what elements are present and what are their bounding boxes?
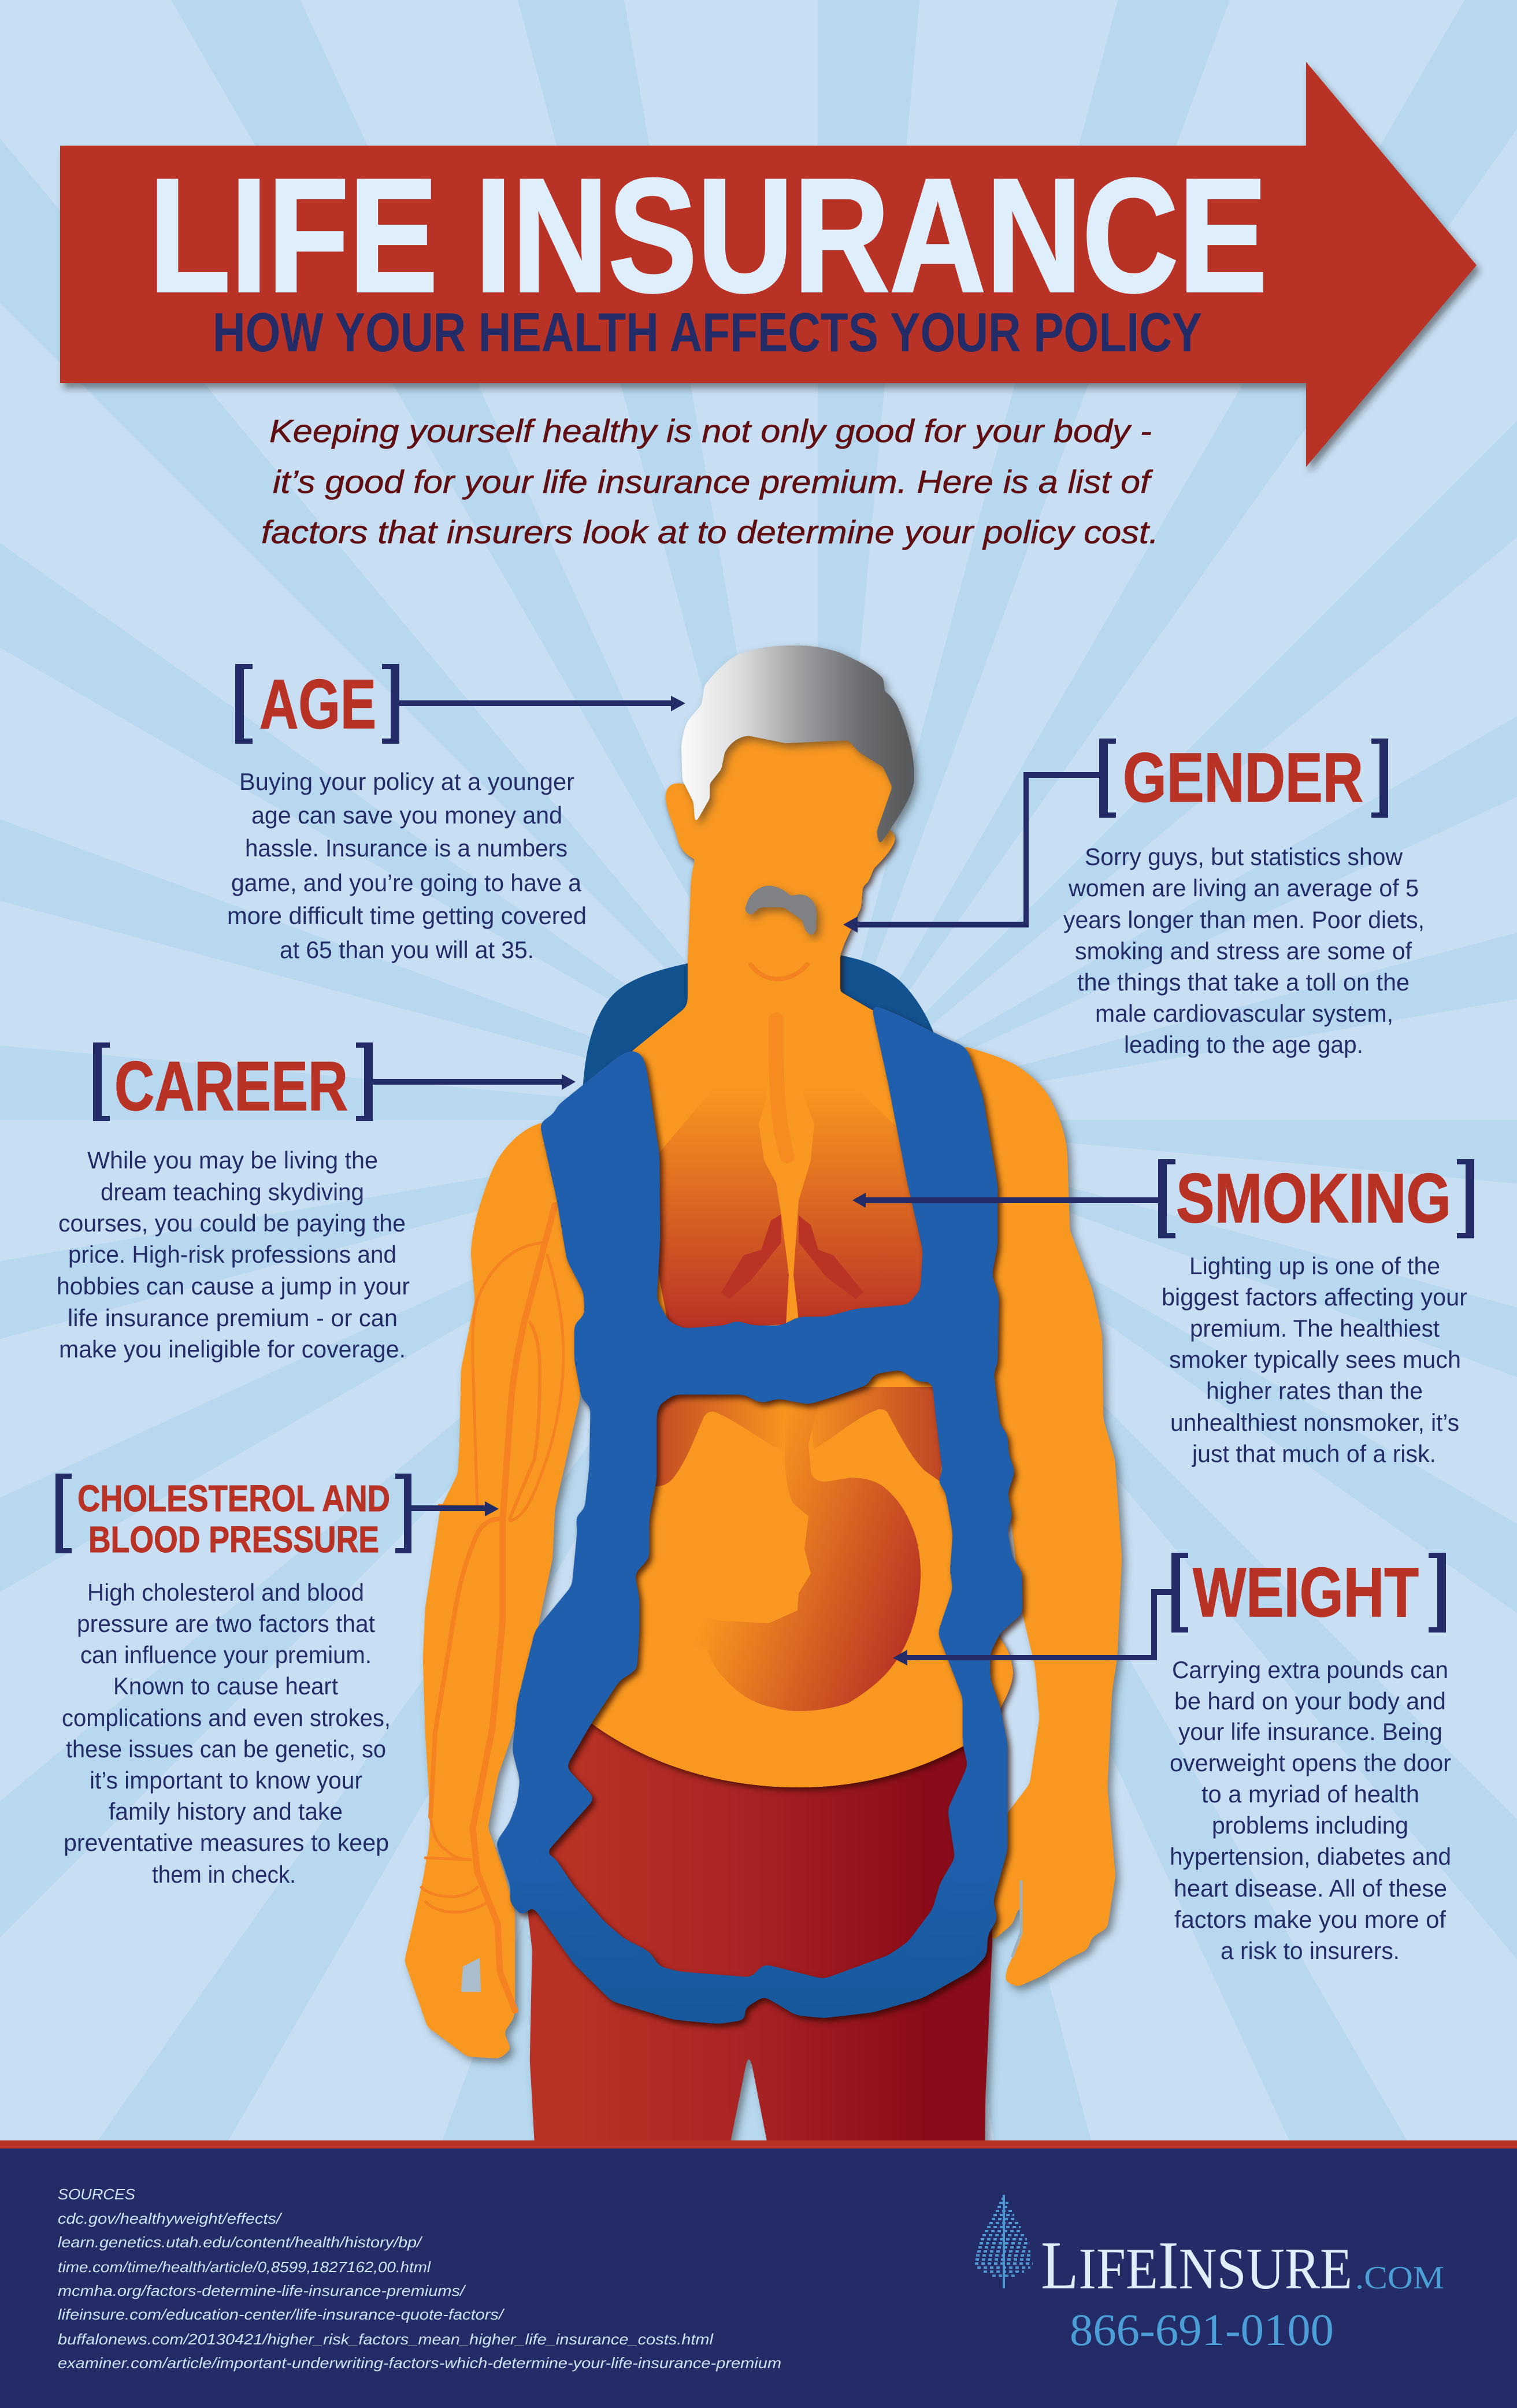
gender heading bracket — [1099, 739, 1388, 818]
age body text: Buying your policy at a younger — [239, 768, 574, 795]
weight body text: your life insurance. Being — [1178, 1718, 1442, 1745]
cholesterol body text: preventative measures to keep — [64, 1829, 389, 1856]
cholesterol body text: them in check. — [152, 1861, 296, 1888]
arrow: smoking to lungs — [852, 1193, 1158, 1208]
panel: age — [227, 664, 685, 963]
arrow: gender to face — [843, 772, 1099, 933]
cholesterol body text: family history and take — [109, 1798, 343, 1825]
arm veins — [421, 1205, 563, 2010]
cholesterol body text: High cholesterol and blood — [87, 1579, 364, 1606]
lifeinsure logo wordmark: LIFEINSURE — [1041, 2227, 1352, 2303]
cholesterol heading — [77, 1478, 390, 1560]
hand detail — [461, 1958, 481, 1992]
head, neck and torso — [578, 722, 1013, 1787]
weight heading: WEIGHT — [1193, 1553, 1419, 1631]
cholesterol body text — [62, 1579, 391, 1888]
cholesterol heading: CHOLESTEROL AND — [77, 1478, 390, 1519]
footer red stripe — [0, 2140, 1517, 2149]
smoking body text: smoker typically sees much — [1169, 1346, 1461, 1373]
weight body text: a risk to insurers. — [1221, 1937, 1400, 1964]
stomach — [649, 1404, 921, 1711]
human figure — [405, 645, 1122, 2173]
gender body text: years longer than men. Poor diets, — [1063, 906, 1425, 933]
mustache — [745, 886, 817, 936]
career body text: dream teaching skydiving — [101, 1178, 364, 1205]
left arm — [405, 1115, 613, 2058]
logo .com: .COM — [1355, 2260, 1444, 2296]
gender heading: GENDER — [1123, 738, 1363, 817]
thumb slit — [1012, 1882, 1021, 1956]
arrow: weight to stomach — [893, 1589, 1171, 1665]
sources list — [58, 2186, 781, 2372]
career body text — [57, 1147, 410, 1363]
sources list: SOURCES — [58, 2186, 136, 2203]
title: life insurance: LIFE INSURANCE — [149, 146, 1267, 326]
trachea — [776, 1020, 787, 1156]
career body text: courses, you could be paying the — [58, 1209, 406, 1237]
weight body text: Carrying extra pounds can — [1172, 1656, 1448, 1683]
panel: cholesterol and blood pressure — [55, 1474, 499, 1888]
cholesterol body text: complications and even strokes, — [62, 1704, 391, 1731]
intro paragraph: factors that insurers look at to determine your policy cost. — [261, 514, 1159, 550]
smile — [751, 964, 807, 979]
weight body text: problems including — [1212, 1812, 1408, 1839]
sources list: examiner.com/article/important-underwriting-factors-which-determine-your-life-insurance-premium — [58, 2354, 781, 2372]
career body text: life insurance premium - or can — [68, 1304, 398, 1331]
subtitle: HOW YOUR HEALTH AFFECTS YOUR POLICY — [213, 302, 1202, 363]
age heading: AGE — [259, 665, 376, 743]
age body text: hassle. Insurance is a numbers — [245, 834, 568, 862]
gender body text — [1063, 843, 1425, 1058]
age body text: age can save you money and — [251, 802, 562, 829]
smoking heading: SMOKING — [1176, 1159, 1451, 1237]
panel: smoking — [852, 1159, 1474, 1467]
arrow: cholesterol to arm — [411, 1501, 499, 1516]
hair — [681, 645, 914, 845]
icon: pine tree logo — [975, 2195, 1033, 2288]
panel: footer — [0, 2140, 1517, 2408]
sources list: cdc.gov/healthyweight/effects/ — [58, 2210, 283, 2227]
weight heading bracket — [1171, 1553, 1446, 1632]
weight body text: heart disease. All of these — [1174, 1875, 1447, 1902]
weight body text: overweight opens the door — [1170, 1749, 1451, 1776]
panel: weight — [893, 1553, 1451, 1964]
right arm — [959, 1046, 1122, 1987]
backpack — [583, 955, 936, 1098]
lungs — [636, 1074, 936, 1330]
arrow: career to backpack — [373, 1074, 576, 1090]
smoking body text: unhealthiest nonsmoker, it’s — [1170, 1409, 1459, 1436]
footer navy background — [0, 2149, 1517, 2408]
gender body text: women are living an average of 5 — [1068, 874, 1419, 901]
career body text: While you may be living the — [87, 1147, 378, 1174]
sources list: learn.genetics.utah.edu/content/health/history/bp/ — [58, 2233, 423, 2251]
smoking body text: Lighting up is one of the — [1189, 1252, 1440, 1279]
cholesterol body text: Known to cause heart — [113, 1672, 338, 1700]
bronchi — [721, 1214, 781, 1299]
phone number: 866-691-0100 — [1070, 2305, 1334, 2355]
sources list: mcmha.org/factors-determine-life-insurance-premiums/ — [58, 2282, 466, 2299]
smoking body text: premium. The healthiest — [1190, 1315, 1440, 1342]
age body text: at 65 than you will at 35. — [280, 936, 534, 963]
age body text — [227, 768, 587, 963]
sources list: buffalonews.com/20130421/higher_risk_factors_mean_higher_life_insurance_costs.html — [58, 2331, 714, 2348]
sources list: lifeinsure.com/education-center/life-insurance-quote-factors/ — [58, 2306, 505, 2323]
age body text: more difficult time getting covered — [227, 902, 587, 929]
weight body text: factors make you more of — [1174, 1906, 1446, 1933]
smoking body text: higher rates than the — [1206, 1377, 1423, 1404]
parachute harness — [496, 1004, 1022, 2024]
cholesterol body text: pressure are two factors that — [77, 1610, 375, 1637]
gender body text: smoking and stress are some of — [1075, 937, 1412, 964]
intro paragraph — [261, 413, 1159, 550]
legs and shorts — [528, 1723, 992, 2173]
age body text: game, and you’re going to have a — [231, 869, 582, 896]
intro paragraph: Keeping yourself healthy is not only good for your body - — [269, 413, 1152, 449]
smoking body text — [1162, 1252, 1467, 1467]
gender body text: male cardiovascular system, — [1095, 1000, 1393, 1027]
cholesterol body text: it’s important to know your — [90, 1767, 362, 1794]
title banner arrow — [60, 62, 1477, 467]
career body text: price. High-risk professions and — [68, 1241, 396, 1268]
weight body text: to a myriad of health — [1201, 1780, 1419, 1808]
weight body text: be hard on your body and — [1174, 1687, 1446, 1715]
weight body text: hypertension, diabetes and — [1170, 1843, 1451, 1870]
intro paragraph: it’s good for your life insurance premium. Here is a list of — [273, 463, 1153, 500]
liver — [647, 1387, 948, 1486]
smoking body text: just that much of a risk. — [1191, 1440, 1436, 1467]
weight body text — [1170, 1656, 1451, 1964]
smoking body text: biggest factors affecting your — [1162, 1283, 1467, 1311]
cholesterol heading: BLOOD PRESSURE — [88, 1519, 379, 1560]
panel: career — [57, 1042, 576, 1363]
career heading: CAREER — [114, 1047, 348, 1125]
career body text: hobbies can cause a jump in your — [57, 1272, 410, 1300]
age heading bracket — [235, 664, 399, 744]
gender body text: leading to the age gap. — [1124, 1031, 1363, 1058]
gender body text: the things that take a toll on the — [1077, 969, 1410, 996]
panel: gender — [843, 738, 1425, 1058]
gender body text: Sorry guys, but statistics show — [1085, 843, 1403, 870]
arrow: age to head — [399, 696, 685, 711]
cholesterol heading bracket — [55, 1474, 411, 1553]
career heading bracket — [93, 1042, 373, 1121]
cholesterol body text: can influence your premium. — [80, 1641, 372, 1668]
cholesterol body text: these issues can be genetic, so — [66, 1735, 386, 1763]
sources list: time.com/time/health/article/0,8599,1827162,00.html — [58, 2258, 431, 2276]
smoking heading bracket — [1158, 1159, 1474, 1238]
career body text: make you ineligible for coverage. — [59, 1335, 406, 1363]
